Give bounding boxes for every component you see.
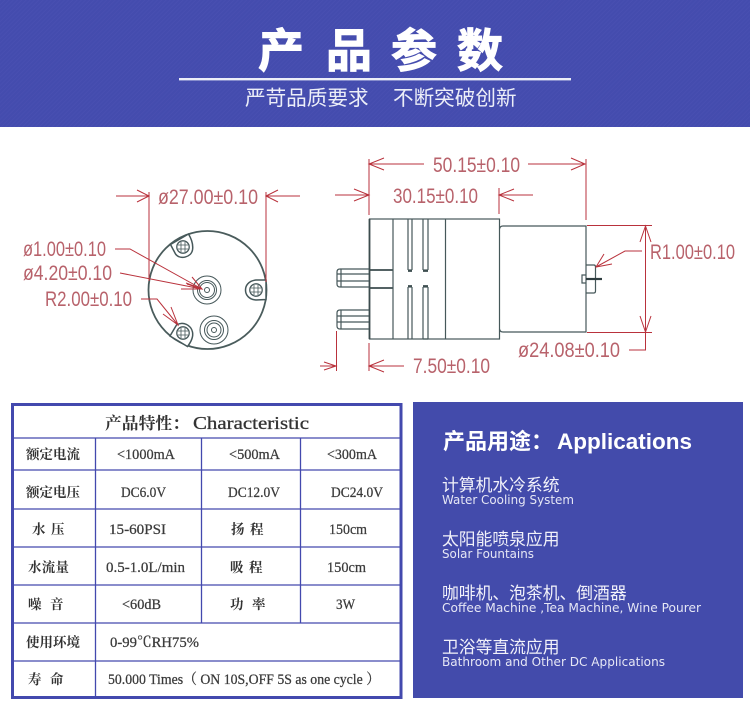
- item: bathroom: [442, 638, 665, 669]
- row: water flow: 水流量: [28, 559, 70, 575]
- row: noise: 噪音: [28, 597, 64, 612]
- dimension: 1.00: [23, 238, 202, 289]
- row: rated voltage: DC24.0V: [331, 485, 383, 501]
- applications heading: 产品用途：: [443, 429, 553, 454]
- row: rated current: [25, 446, 378, 463]
- item: bathroom: 卫浴等直流应用: [442, 638, 559, 657]
- dimension: 27.00: ø27.00±0.10: [158, 186, 258, 209]
- row: rated voltage: DC6.0V: [121, 485, 166, 501]
- dimension: 4.20: [23, 262, 202, 289]
- item: solar fountains: [442, 530, 559, 561]
- item: water cooling: [442, 476, 574, 507]
- row: water flow: 0.5-1.0L/min: [106, 560, 186, 576]
- subtitle right: 不断突破创新: [393, 87, 517, 110]
- pump outline circle: [148, 231, 266, 349]
- row: environment: [26, 634, 199, 651]
- drawing: pump side view: [320, 154, 735, 378]
- terminal screw: [582, 265, 602, 293]
- row: rated current: <1000mA: [117, 447, 176, 463]
- inlet port upper: [337, 269, 369, 287]
- centre port: [193, 276, 221, 304]
- row: environment: 使用环境: [26, 634, 80, 650]
- row: water flow: 150cm: [327, 560, 367, 576]
- applications heading: Applications: [557, 429, 692, 454]
- table heading: 产品特性：: [105, 413, 189, 433]
- drawing: pump front view: [23, 186, 300, 349]
- dimension: R2.00: R2.00±0.10: [45, 288, 132, 311]
- item: coffee machine: 咖啡机、泡茶机、倒酒器: [442, 584, 627, 603]
- row: rated voltage: DC12.0V: [228, 485, 280, 501]
- row: noise: [28, 596, 355, 613]
- subtitle: 严苛品质要求: [245, 87, 369, 110]
- dimension: 27.00: [116, 186, 300, 282]
- dimension: 24.08: ø24.08±0.10: [518, 339, 620, 362]
- screw top-left: [170, 234, 193, 257]
- dimension: R1.00: [596, 241, 735, 267]
- row: water pressure: 150cm: [329, 522, 368, 538]
- row: rated voltage: [25, 484, 383, 501]
- row: water flow: 吸程: [230, 559, 263, 575]
- item: solar fountains: 太阳能喷泉应用: [442, 530, 559, 549]
- row: rated current: 额定电流: [25, 446, 80, 462]
- row: life: 寿命: [28, 671, 64, 687]
- item: coffee machine: [442, 584, 701, 615]
- pump body: [370, 219, 500, 339]
- row: water flow: [28, 559, 367, 576]
- item: water cooling: Water Cooling System: [442, 493, 574, 507]
- table heading: Characteristic: [193, 413, 309, 433]
- dimension: 50.15: [369, 154, 586, 220]
- row: water pressure: 扬程: [231, 521, 264, 537]
- item: solar fountains: Solar Fountains: [442, 547, 534, 561]
- row: noise: 3W: [336, 597, 355, 613]
- row: noise: <60dB: [122, 597, 161, 613]
- panel: applications: [413, 402, 743, 698]
- header banner: [0, 0, 750, 127]
- item: coffee machine: Coffee Machine ,Tea Machine, Wine Pourer: [442, 601, 701, 615]
- row: water pressure: 水压: [32, 522, 65, 537]
- dimension: 7.50: [320, 331, 490, 378]
- dimension: 4.20: ø4.20±0.10: [23, 262, 112, 285]
- screw bottom-left: [170, 323, 193, 346]
- dimension: 7.50: 7.50±0.10: [413, 355, 490, 378]
- dimension: 24.08: [518, 226, 652, 362]
- dimension: 50.15: 50.15±0.10: [433, 154, 520, 177]
- row: rated voltage: 额定电压: [25, 484, 80, 500]
- item: water cooling: 计算机水冷系统: [442, 476, 560, 495]
- row: water pressure: 15-60PSI: [109, 522, 166, 538]
- dimension: 30.15: 30.15±0.10: [393, 185, 478, 208]
- screw right: [246, 280, 266, 300]
- row: rated current: <300mA: [327, 447, 378, 463]
- dimension: 1.00: ø1.00±0.10: [23, 238, 106, 261]
- row: noise: 功率: [230, 596, 266, 612]
- dimension: R2.00: [45, 288, 178, 325]
- row: life: 50.000 Times（ ON 10S,OFF 5S as one cycle ）: [108, 671, 380, 688]
- table heading: [105, 413, 309, 433]
- panel: characteristic table: [12, 404, 401, 698]
- item: bathroom: Bathroom and Other DC Applications: [442, 655, 665, 669]
- row: rated current: <500mA: [229, 447, 281, 463]
- motor body: [500, 226, 586, 332]
- dimension: 30.15: [335, 185, 533, 214]
- row: environment: 0-99℃RH75%: [110, 635, 199, 651]
- row: water pressure: [32, 521, 368, 538]
- title: 产品参数: [258, 25, 503, 77]
- inlet port lower: [337, 310, 369, 329]
- applications heading: [443, 429, 692, 454]
- lower port: [200, 316, 228, 344]
